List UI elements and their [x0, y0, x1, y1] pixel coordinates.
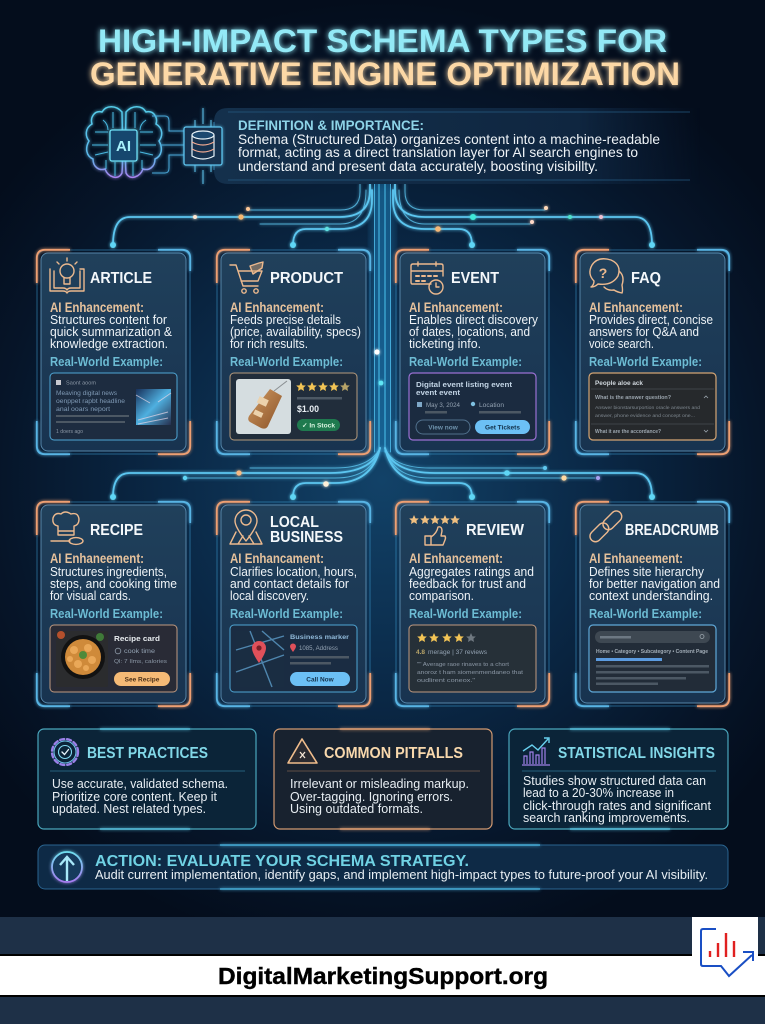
title: article: ARTICLE: [90, 270, 152, 287]
text: review enhancement: [409, 551, 534, 621]
text: faq enhancement: AI Enhancement:: [589, 300, 683, 315]
example: map listing: [230, 625, 357, 692]
text: local business enhancement: [230, 551, 357, 621]
icon: AI brain and database: [86, 107, 222, 184]
text: local business enhancement: Real-World Example:: [230, 606, 343, 621]
example: event listing: Location: [479, 403, 504, 409]
text: statistical insights: click-through rates and significant: [523, 798, 711, 813]
text: event enhancement: of dates, locations, and: [409, 324, 530, 339]
text: breadcrumb enhancement: Defines site hierarchy: [589, 564, 704, 579]
text: event enhancement: ticketing info.: [409, 336, 481, 351]
text: local business enhancement: AI Enhancament:: [230, 551, 324, 566]
icon: map pin on map: [230, 510, 262, 544]
text: best practices: Use accurate, validated schema.: [52, 776, 228, 791]
example: breadcrumb search result: [589, 625, 716, 692]
text: common pitfalls: [290, 776, 469, 816]
example: product listing: ✓ In Stock: [302, 422, 335, 430]
footer band with site name: DigitalMarketingSupport.org: [218, 963, 548, 989]
text: recipe enhancement: Real-World Example:: [50, 606, 163, 621]
example: news snippet: [50, 373, 177, 440]
text: event enhancement: AI Enhancement:: [409, 300, 503, 315]
example: people also ask: People aloe ack: [595, 380, 643, 387]
title: local business: LOCAL: [270, 514, 319, 531]
card: review: [396, 502, 549, 706]
heading: statistical insights: STATISTICAL INSIGHTS: [558, 745, 715, 762]
text: common pitfalls: Using outdated formats.: [290, 801, 423, 816]
connector lines: upper and lower branches from the central trunk: [110, 184, 655, 500]
example: review snippet: merage | 37 reviews: [428, 650, 487, 656]
icon: open book with light bulb: [50, 258, 84, 293]
text: local business enhancement: Clarifies location, hours,: [230, 564, 357, 579]
text: product enhancement: AI Enhancement:: [230, 300, 324, 315]
example: event listing: event event: [416, 388, 461, 397]
icon: chain link: [588, 509, 624, 544]
card: recipe: [37, 502, 190, 706]
example: product listing: $1.00: [297, 404, 319, 414]
footer background: [0, 917, 765, 1024]
text: statistical insights: search ranking improvements.: [523, 810, 690, 825]
text: best practices: [52, 776, 228, 816]
text: product enhancement: (price, availability, specs): [230, 324, 361, 339]
text: faq enhancement: Real-World Example:: [589, 354, 702, 369]
text: faq enhancement: answers for Q&A and: [589, 324, 699, 339]
text: article enhancement: Real-World Example:: [50, 354, 163, 369]
text: product enhancement: for rich results.: [230, 336, 308, 351]
heading: best practices: BEST PRACTICES: [87, 745, 208, 762]
example: event listing: Get Tickets: [485, 424, 520, 432]
example: people also ask: What it are the accordance?: [595, 429, 661, 435]
text: statistical insights: Studies show structured data can: [523, 773, 706, 788]
title: faq: FAQ: [631, 270, 661, 287]
icon: chef hat and spoon: [51, 512, 83, 544]
title: HIGH-IMPACT SCHEMA TYPES FOR: [98, 23, 667, 59]
logo: [692, 917, 758, 977]
text: common pitfalls: Over-tagging. Ignoring errors.: [290, 789, 453, 804]
icon: up arrow in circle: [52, 852, 82, 882]
text: faq enhancement: voice search.: [589, 336, 654, 351]
text: local business enhancement: and contact details for: [230, 576, 350, 591]
text: event enhancement: [409, 300, 538, 369]
text: action: Audit current implementation, identify gaps, and implement high-impact types to future-proof your AI visibility.: [95, 868, 708, 882]
icon: calendar with clock: [411, 262, 443, 294]
card: article: [37, 250, 190, 454]
title: local business: [270, 514, 343, 546]
panel: best practices: [38, 729, 256, 829]
text: breadcrumb enhancement: for better navigation and: [589, 576, 720, 591]
example: people also ask: [589, 373, 716, 440]
example: news snippet: 1 doers ago: [56, 429, 83, 435]
card: product: [217, 250, 370, 454]
text: faq enhancement: Provides direct, concise: [589, 312, 713, 327]
example: review snippet: oudlirent coneox.": [417, 678, 475, 684]
text: review enhancement: AI Enhancement:: [409, 551, 503, 566]
example: people also ask: Answer bionstarsurportion oracle answers and: [595, 405, 700, 411]
card: event: [396, 250, 549, 454]
icon: AI brain and database: AI: [116, 138, 131, 155]
text: best practices: Prioritize core content. Keep it: [52, 789, 217, 804]
text: recipe enhancement: Structures ingredients,: [50, 564, 167, 579]
text: product enhancement: Feeds precise details: [230, 312, 341, 327]
text: event enhancement: Enables direct discovery: [409, 312, 538, 327]
example: product listing: [230, 373, 357, 440]
title: event: EVENT: [451, 270, 499, 287]
example: recipe card: [50, 625, 177, 692]
title: review: REVIEW: [466, 522, 524, 539]
heading: common pitfalls: COMMON PITFALLS: [324, 745, 463, 762]
icon: shopping cart with tag: [230, 262, 263, 293]
icon: warning triangle: [288, 739, 317, 763]
title: product: PRODUCT: [270, 270, 344, 287]
panel: call to action: [38, 845, 728, 889]
heading: action: ACTION: EVALUATE YOUR SCHEMA STRATEGY.: [95, 853, 469, 870]
example: event listing: May 3, 2024: [426, 403, 461, 409]
example: event listing: Digital event listing event: [416, 380, 513, 389]
text: recipe enhancement: AI Enhaneement:: [50, 551, 144, 566]
text: breadcrumb enhancement: [589, 551, 720, 621]
title: [90, 23, 680, 92]
title: breadcrumb: BREADCRUMB: [625, 522, 719, 539]
title: GENERATIVE ENGINE OPTIMIZATION: [90, 56, 680, 92]
icon: gear with check: [52, 739, 78, 765]
example: recipe card: See Recipe: [125, 676, 160, 684]
text: recipe enhancement: for visual cards.: [50, 588, 131, 603]
text: recipe enhancement: [50, 551, 177, 621]
icon: question speech bubbles: ?: [599, 265, 607, 281]
title: recipe: RECIPE: [90, 522, 143, 539]
example: news snippet: Meaving digital news: [56, 391, 117, 397]
example: map listing: Business marker: [290, 634, 350, 641]
panel: definition and importance: understand and present data accurately, boosting visibillty.: [238, 158, 598, 174]
text: product enhancement: [230, 300, 361, 369]
example: map listing: Call Now: [306, 676, 335, 684]
example: review snippet: 4.8: [416, 649, 425, 656]
example: people also ask: answer, phone evidence and concept one...: [595, 413, 695, 419]
example: event listing: [409, 373, 536, 440]
example: people also ask: What is the answer question?: [595, 395, 671, 401]
panel: statistical insights: [509, 729, 728, 829]
text: article enhancement: [50, 300, 172, 369]
panel: definition and importance: Schema (Structured Data) organizes content into a machine-readable: [238, 131, 660, 147]
text: statistical insights: [523, 773, 711, 825]
example: review snippet: [409, 625, 536, 692]
text: review enhancement: feedback for trust and: [409, 576, 526, 591]
title: local business: BUSINESS: [270, 529, 343, 546]
text: recipe enhancement: steps, and cooking time: [50, 576, 177, 591]
example: breadcrumb search result: Home • Category • Subcategory • Content Page: [596, 649, 708, 655]
text: review enhancement: Real-World Example:: [409, 606, 522, 621]
example: event listing: View now: [428, 424, 459, 432]
icon: rising bar chart: [522, 738, 550, 765]
panel: common pitfalls: [274, 729, 492, 829]
text: review enhancement: Aggregates ratings and: [409, 564, 534, 579]
panel: definition and importance: format, acting as a direct translation layer for AI search engines to: [238, 144, 638, 160]
text: breadcrumb enhancement: AI Enhaneement:: [589, 551, 683, 566]
panel: definition and importance: [203, 108, 700, 184]
text: article enhancement: Structures content for: [50, 312, 168, 327]
text: best practices: updated. Nest related types.: [52, 801, 206, 816]
card: faq: [576, 250, 729, 454]
example: recipe card: cook time: [124, 649, 156, 655]
panel: definition and importance: DEFINITION & IMPORTANCE:: [238, 118, 424, 133]
text: product enhancement: Real-World Example:: [230, 354, 343, 369]
icon: stars and thumbs up: [409, 515, 460, 545]
text: breadcrumb enhancement: context understanding.: [589, 588, 713, 603]
text: statistical insights: lead to a 20-30% increase in: [523, 785, 674, 800]
card: local business: [217, 502, 370, 706]
text: review enhancement: comparison.: [409, 588, 474, 603]
text: local business enhancement: local discovery.: [230, 588, 309, 603]
example: recipe card: Recipe card: [114, 634, 160, 643]
example: map listing: 1085, Address: [299, 646, 338, 652]
text: article enhancement: knowledge extraction.: [50, 336, 168, 351]
text: article enhancement: AI Enhancement:: [50, 300, 144, 315]
example: news snippet: oenppet rapbt headline: [56, 399, 126, 405]
example: news snippet: anal ooars neport: [56, 407, 110, 413]
card: breadcrumb: [576, 502, 729, 706]
example: review snippet: anoroz t ham siomenmendaneo that: [417, 670, 524, 676]
example: recipe card: Ql: 7 Ilms, calories: [114, 659, 167, 665]
icon: question speech bubbles: [590, 259, 623, 293]
text: event enhancement: Real-World Example:: [409, 354, 522, 369]
text: faq enhancement: [589, 300, 713, 369]
text: article enhancement: quick summarization &: [50, 324, 172, 339]
footer band with site name: [0, 954, 765, 997]
example: review snippet: "" Average raoe rinaves to a chort: [417, 662, 510, 668]
example: news snippet: Saont aoom: [66, 380, 96, 386]
text: common pitfalls: Irrelevant or misleading markup.: [290, 776, 469, 791]
text: breadcrumb enhancement: Real-World Example:: [589, 606, 702, 621]
